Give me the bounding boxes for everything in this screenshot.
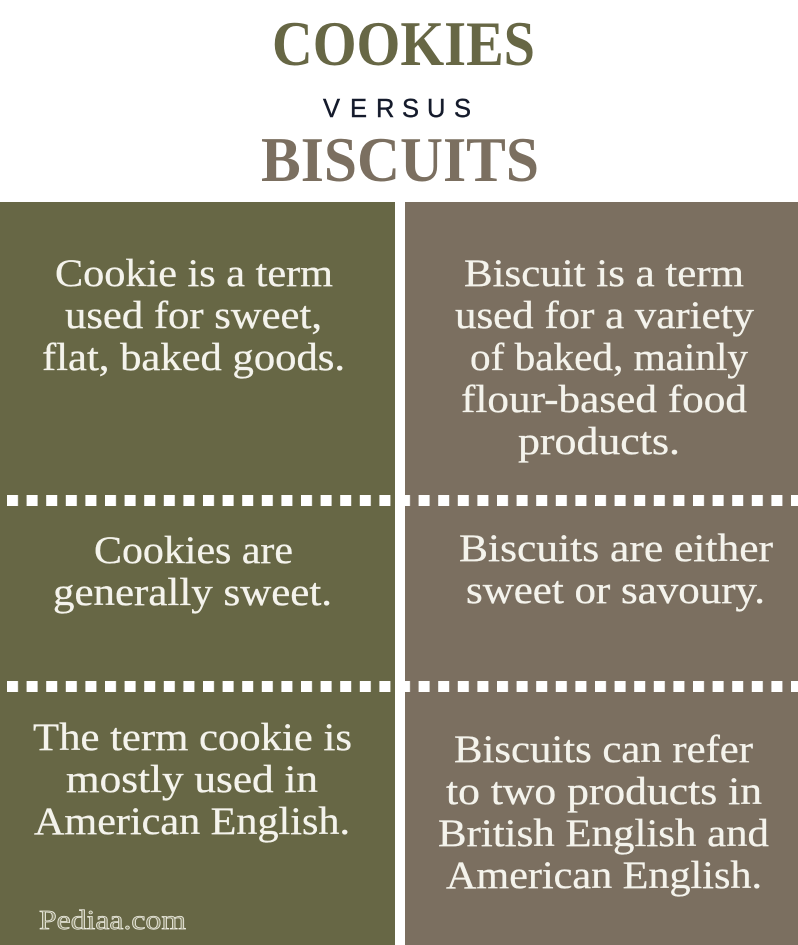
- text: cookie definition: flat, baked goods.: [42, 335, 345, 379]
- text: cookie usage: [33, 715, 352, 843]
- text: cookie usage: mostly used in: [66, 757, 318, 801]
- text: biscuit usage: to two products in: [446, 769, 762, 813]
- text: cookie definition: Cookie is a term: [55, 251, 333, 295]
- title: biscuits: BISCUITS: [261, 124, 539, 195]
- text: cookie taste: generally sweet.: [53, 570, 332, 614]
- title: cookies: COOKIES: [272, 8, 535, 79]
- text: cookie taste: Cookies are: [94, 528, 293, 572]
- text: biscuit taste: [459, 526, 773, 612]
- logo: Pediaa.com: Pediaa.com: [39, 905, 186, 935]
- text: biscuit taste: sweet or savoury.: [466, 568, 765, 612]
- subtitle: versus: VERSUS: [323, 95, 471, 123]
- text: biscuit definition: used for a variety: [455, 293, 754, 337]
- text: biscuit definition: Biscuit is a term: [464, 251, 744, 295]
- text: biscuit usage: American English.: [446, 853, 762, 897]
- text: cookie usage: American English.: [34, 799, 350, 843]
- text: biscuit taste: Biscuits are either: [459, 526, 773, 570]
- text: cookie taste: [53, 528, 332, 614]
- text: cookie usage: The term cookie is: [33, 715, 352, 759]
- panel: biscuits: [405, 202, 798, 945]
- text: biscuit usage: [438, 727, 769, 897]
- text: biscuit definition: products.: [518, 419, 680, 463]
- text: biscuit definition: of baked, mainly: [470, 335, 748, 379]
- text: cookie definition: used for sweet,: [65, 293, 322, 337]
- text: biscuit definition: flour-based food: [461, 377, 747, 421]
- text: biscuit usage: British English and: [438, 811, 769, 855]
- panel: cookies: [0, 202, 395, 945]
- text: biscuit definition: [455, 251, 754, 463]
- text: cookie definition: [42, 251, 345, 379]
- text: biscuit usage: Biscuits can refer: [454, 727, 753, 771]
